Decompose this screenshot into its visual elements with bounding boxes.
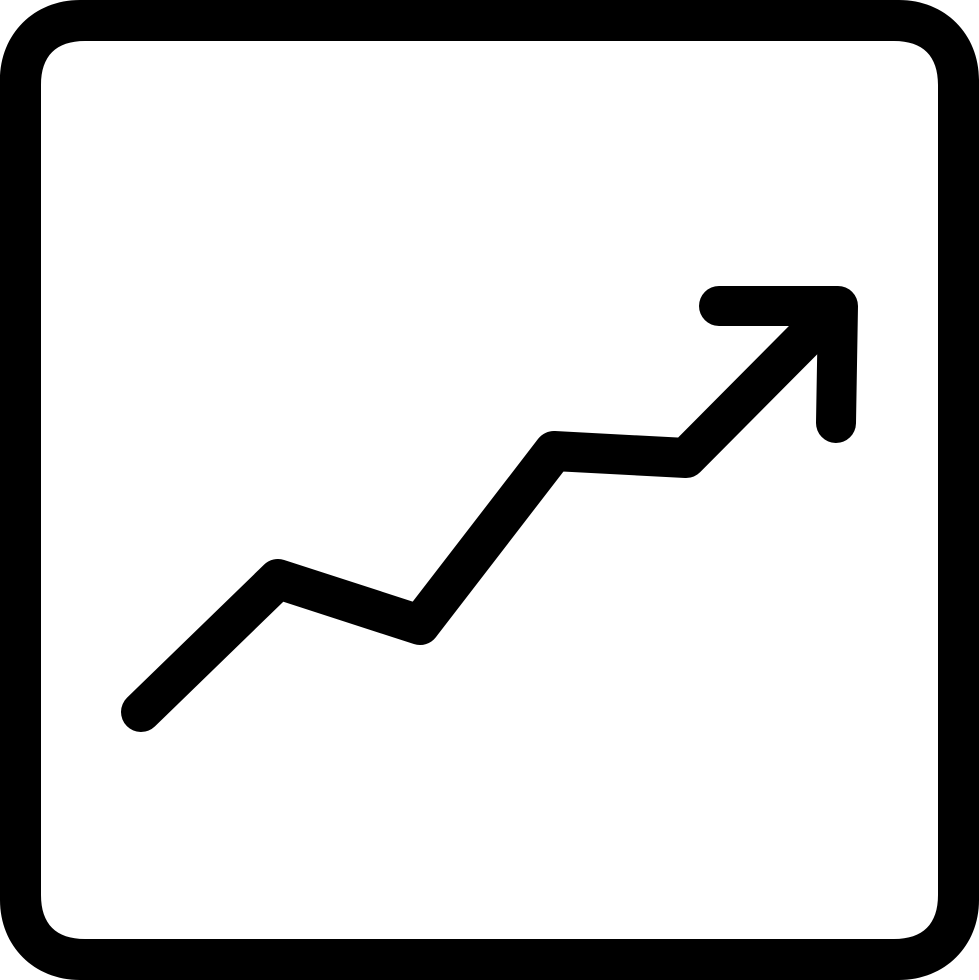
zigzag trend line: [141, 308, 835, 712]
rising arrow: [141, 306, 838, 712]
arrowhead: [719, 306, 838, 423]
